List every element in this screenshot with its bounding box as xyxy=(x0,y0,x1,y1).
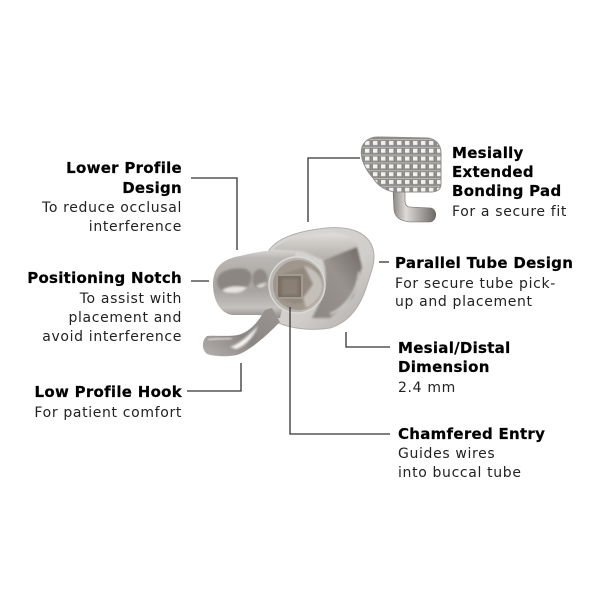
illustration: bonding pad xyxy=(361,137,441,222)
callout: Mesially Extended Bonding Pad: Extended xyxy=(452,163,534,181)
bore light facet xyxy=(303,266,323,308)
hole highlight xyxy=(256,282,267,288)
side face light stripe xyxy=(330,272,359,314)
callout: Mesial/Distal Dimension: Mesial/Distal xyxy=(398,339,511,357)
callout: Mesially Extended Bonding Pad: Mesially xyxy=(452,144,524,162)
channel inner xyxy=(282,279,298,295)
callout: Positioning Notch: placement and xyxy=(68,310,182,326)
callout: Lower Profile Design: Design xyxy=(122,179,182,197)
callout: Mesial/Distal Dimension xyxy=(398,339,511,396)
callout: Parallel Tube Design: up and placement xyxy=(395,294,533,310)
cylinder body xyxy=(213,250,296,318)
callout: Lower Profile Design: interference xyxy=(89,219,182,235)
callout: Low Profile Hook: For patient comfort xyxy=(34,405,182,421)
callout: Lower Profile Design xyxy=(41,159,182,235)
square channel xyxy=(277,275,302,298)
callout: Positioning Notch: To assist with xyxy=(79,291,182,307)
callout: Chamfered Entry: Guides wires xyxy=(398,446,495,462)
callout: Positioning Notch xyxy=(27,269,182,345)
callout: Chamfered Entry: Chamfered Entry xyxy=(398,425,545,443)
entry bore xyxy=(273,260,323,310)
illustration: buccal tube xyxy=(203,228,374,356)
pad hook xyxy=(393,190,436,222)
upper facet shading xyxy=(272,233,358,260)
hexagon opening xyxy=(276,267,323,304)
callout: Positioning Notch: Positioning Notch xyxy=(27,269,182,287)
callout: Lower Profile Design: To reduce occlusal xyxy=(41,200,182,216)
second hole xyxy=(252,269,268,289)
tube back body xyxy=(268,228,374,329)
callout: Mesial/Distal Dimension: Dimension xyxy=(398,358,490,376)
callout: Low Profile Hook xyxy=(34,383,183,421)
callout: Mesial/Distal Dimension: 2.4 mm xyxy=(398,380,456,396)
hook highlight xyxy=(230,326,258,349)
callout: Positioning Notch: avoid interference xyxy=(42,329,182,345)
callout: Mesially Extended Bonding Pad xyxy=(452,144,567,220)
hook xyxy=(203,308,280,356)
hook end highlight xyxy=(208,338,232,340)
callout: Chamfered Entry xyxy=(398,425,545,481)
callout: Mesially Extended Bonding Pad: Bonding Pad xyxy=(452,182,561,200)
callout: Chamfered Entry: into buccal tube xyxy=(398,465,522,481)
callout: Mesially Extended Bonding Pad: For a secure fit xyxy=(452,204,567,220)
side face shading xyxy=(312,247,362,318)
positioning notch slot xyxy=(217,268,252,293)
callout: Parallel Tube Design: For secure tube pick- xyxy=(395,276,556,292)
chamfered entry ring xyxy=(269,257,325,313)
leader lines xyxy=(187,158,390,434)
pad mesh xyxy=(361,137,441,192)
callout: Parallel Tube Design: Parallel Tube Design xyxy=(395,254,573,272)
callout: Low Profile Hook: Low Profile Hook xyxy=(35,383,183,401)
callout: Parallel Tube Design xyxy=(395,254,573,310)
notch highlight xyxy=(222,286,247,293)
callout: Lower Profile Design: Lower Profile xyxy=(66,159,182,177)
